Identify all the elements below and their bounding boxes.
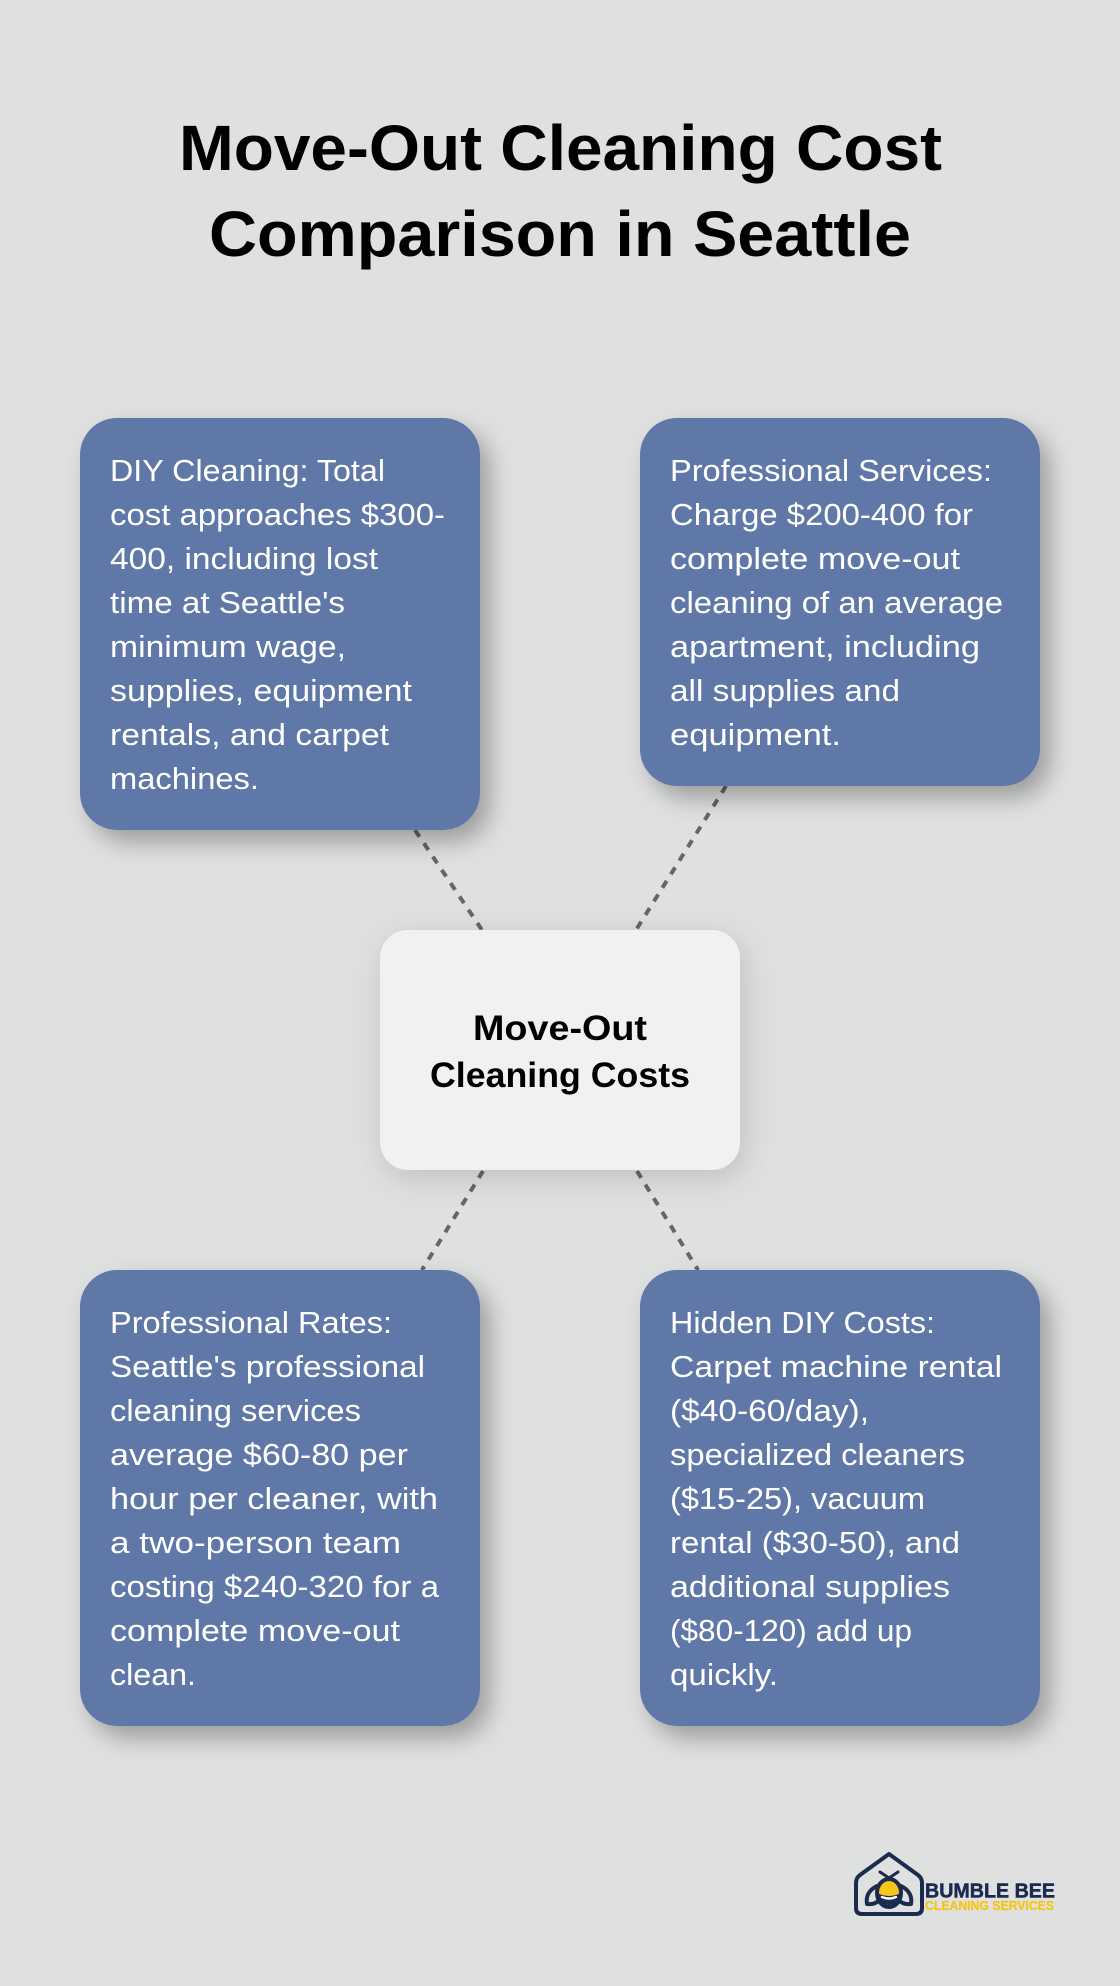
- panel: professional rates: [80, 1270, 480, 1726]
- text: DIY cleaning details: [110, 453, 445, 796]
- text: DIY cleaning details: time at Seattle's: [110, 585, 345, 620]
- text: hidden DIY costs details: ($15-25), vacuum: [670, 1481, 925, 1516]
- text: hidden DIY costs details: quickly.: [670, 1657, 778, 1692]
- text: professional services details: apartment, including: [670, 629, 980, 664]
- logo wordmark: [925, 1880, 1055, 1913]
- panel: center topic: [380, 930, 740, 1170]
- connector: DIY cleaning to center: [415, 830, 482, 930]
- icon: house with bee: [856, 1854, 922, 1914]
- text: professional rates details: a two-person team: [110, 1525, 401, 1560]
- text: professional services details: all supplies and: [670, 673, 900, 708]
- text: professional rates details: clean.: [110, 1657, 196, 1692]
- text: professional rates details: complete move-out: [110, 1613, 400, 1648]
- text: DIY cleaning details: 400, including lost: [110, 541, 378, 576]
- text: hidden DIY costs details: rental ($30-50), and: [670, 1525, 960, 1560]
- text: professional services details: equipment.: [670, 717, 841, 752]
- title: [179, 112, 942, 270]
- text: professional rates details: costing $240-320 for a: [110, 1569, 440, 1604]
- logo wordmark: BUMBLE BEE: [925, 1880, 1055, 1902]
- panel: professional services: [640, 418, 1040, 786]
- text: center topic label: Cleaning Costs: [430, 1056, 690, 1095]
- text: DIY cleaning details: rentals, and carpet: [110, 717, 389, 752]
- text: professional rates details: Seattle's professional: [110, 1349, 425, 1384]
- text: hidden DIY costs details: Hidden DIY Costs:: [670, 1305, 935, 1340]
- text: DIY cleaning details: DIY Cleaning: Total: [110, 453, 385, 488]
- text: center topic label: [430, 1009, 690, 1095]
- text: DIY cleaning details: minimum wage,: [110, 629, 346, 664]
- text: hidden DIY costs details: additional supplies: [670, 1569, 950, 1604]
- connector: hidden DIY costs to center: [637, 1171, 698, 1270]
- text: hidden DIY costs details: Carpet machine rental: [670, 1349, 1002, 1384]
- text: professional rates details: cleaning services: [110, 1393, 361, 1428]
- text: professional services details: [670, 453, 1003, 752]
- connector: professional rates to center: [422, 1171, 483, 1270]
- text: hidden DIY costs details: ($40-60/day),: [670, 1393, 869, 1428]
- text: DIY cleaning details: supplies, equipment: [110, 673, 412, 708]
- text: professional rates details: Professional Rates:: [110, 1305, 392, 1340]
- connector: professional services to center: [636, 786, 726, 930]
- text: hidden DIY costs details: specialized cleaners: [670, 1437, 965, 1472]
- text: professional rates details: average $60-80 per: [110, 1437, 408, 1472]
- text: professional services details: cleaning of an average: [670, 585, 1003, 620]
- text: professional services details: complete move-out: [670, 541, 960, 576]
- title: Comparison in Seattle: [209, 198, 911, 270]
- text: DIY cleaning details: cost approaches $300-: [110, 497, 445, 532]
- text: professional rates details: hour per cleaner, with: [110, 1481, 438, 1516]
- panel: hidden DIY costs: [640, 1270, 1040, 1726]
- text: DIY cleaning details: machines.: [110, 761, 259, 796]
- panel: DIY cleaning: [80, 418, 480, 830]
- title: Move-Out Cleaning Cost: [179, 112, 942, 184]
- text: center topic label: Move-Out: [473, 1009, 647, 1048]
- text: hidden DIY costs details: ($80-120) add up: [670, 1613, 912, 1648]
- logo: Bumble Bee Cleaning Services: [856, 1854, 1055, 1914]
- text: hidden DIY costs details: [670, 1305, 1002, 1692]
- text: professional rates details: [110, 1305, 440, 1692]
- text: professional services details: Professional Services:: [670, 453, 992, 488]
- logo wordmark: CLEANING SERVICES: [925, 1899, 1054, 1913]
- text: professional services details: Charge $200-400 for: [670, 497, 973, 532]
